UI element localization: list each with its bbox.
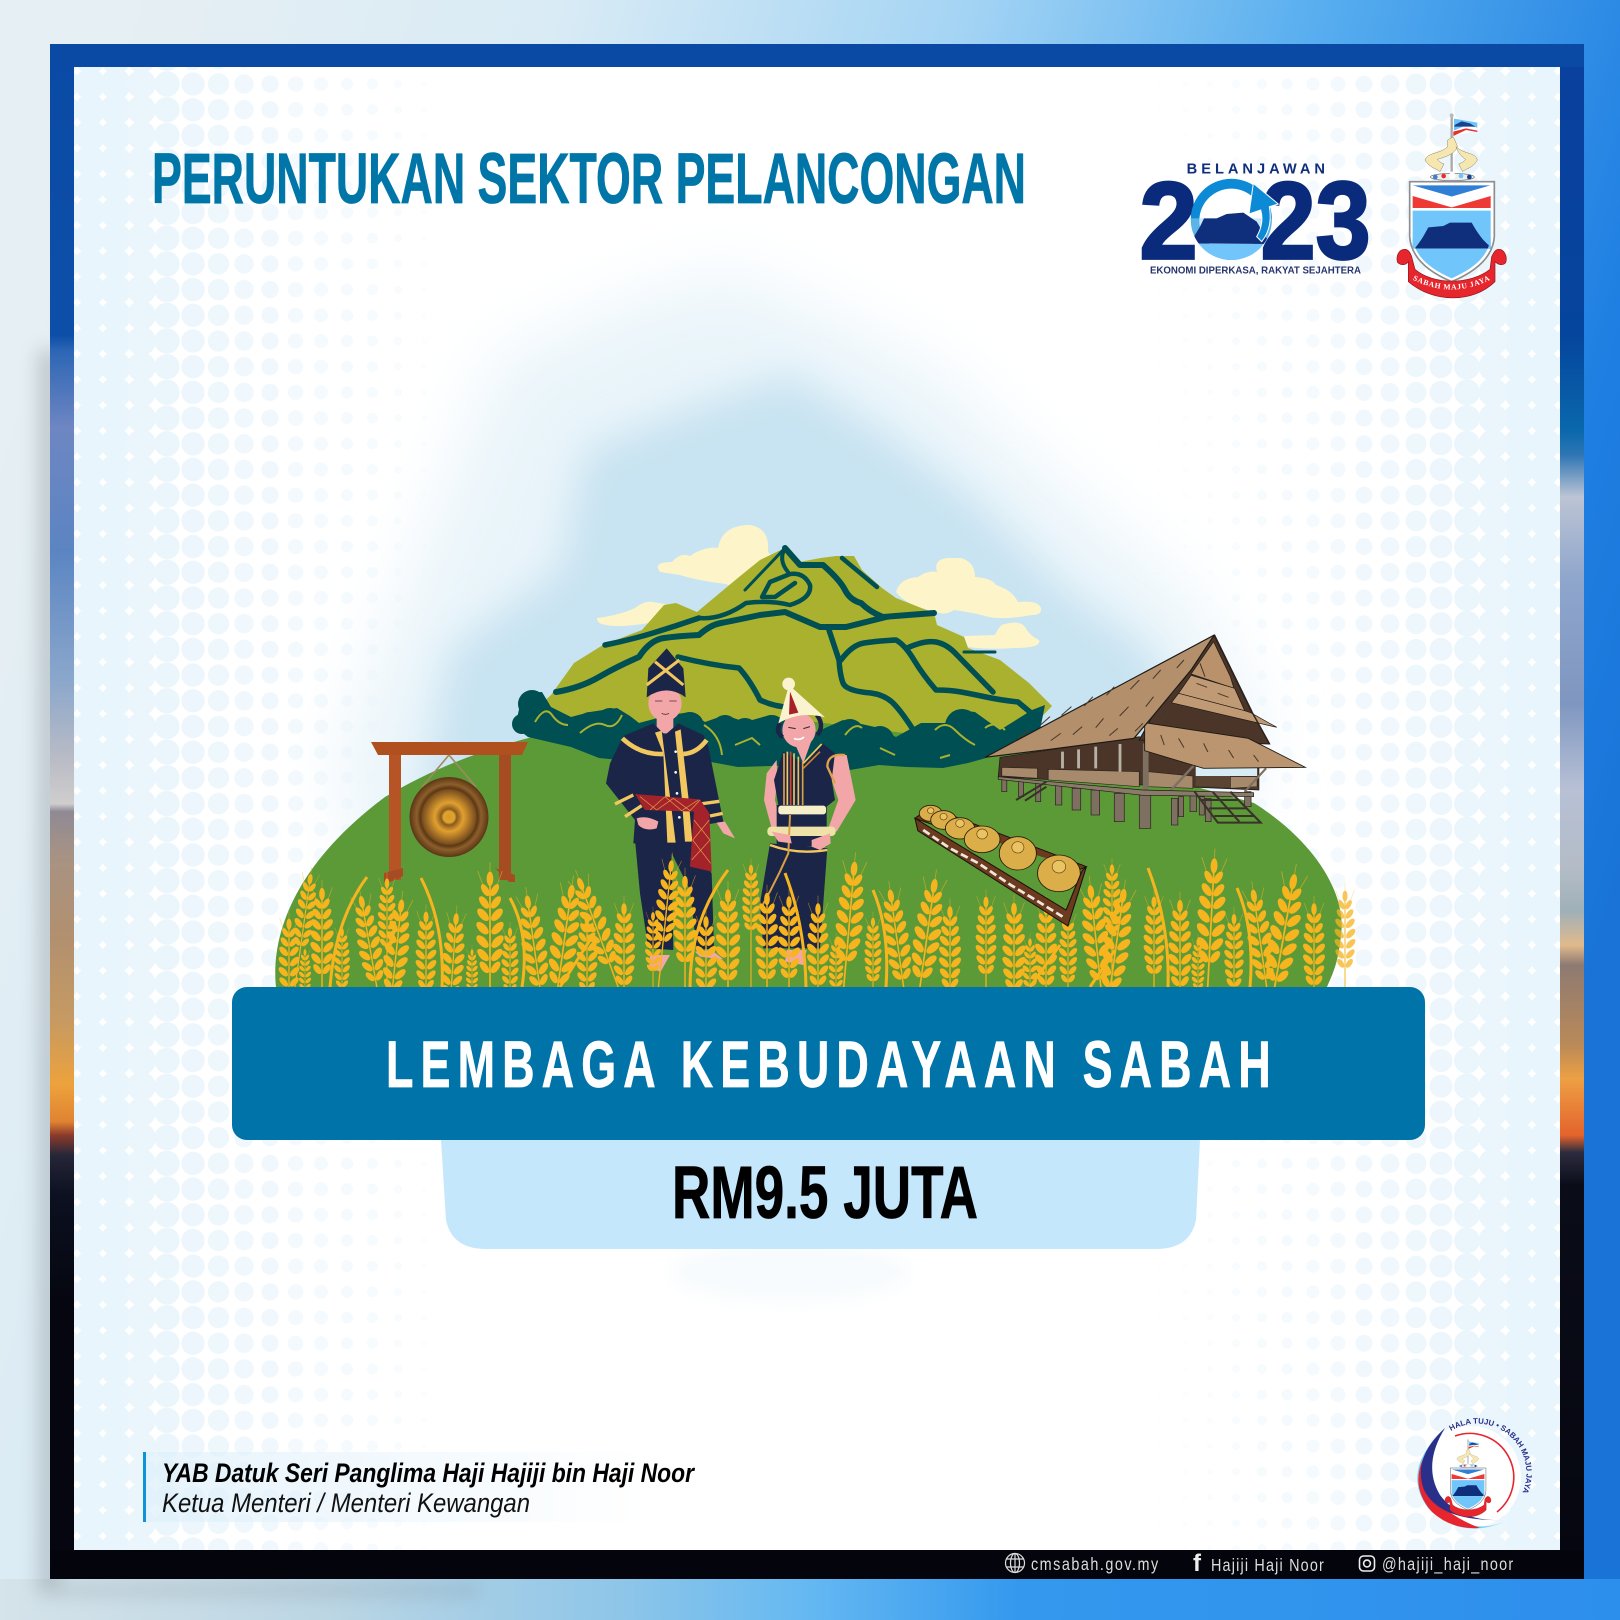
man trousers [635,840,714,950]
man hat [647,648,686,697]
woman feet [785,950,807,965]
logo: Sabah coat of arms [1396,113,1507,298]
woman neck [793,740,812,763]
round logo crescent [1417,1428,1504,1528]
banner text: LEMBAGA KEBUDAYAAN SABAH [386,1027,1271,1101]
man jacket trim [615,738,723,817]
clouds [597,525,1041,649]
instagram handle: @hajiji_haji_noor [1382,1555,1514,1574]
woman arms [764,760,782,828]
longhouse floor beam [998,777,1254,797]
woman bodice stripes [784,744,845,805]
logo ring with mountain [1190,178,1272,260]
longhouse [985,635,1305,828]
illustration: Sabah cultural scene [275,525,1357,1093]
kulintang gongs [919,805,1080,892]
man sash [635,794,712,872]
watercolour cloud backdrop [340,275,1260,1302]
amount: RM9.5 JUTA [672,1151,978,1234]
woman skirt [760,843,827,948]
mountain [540,548,1052,760]
woman face [782,713,816,747]
gong disc [410,777,488,857]
frame left strip [50,44,74,1579]
gong stand [371,742,528,882]
man hands [637,817,658,829]
round logo crest [1445,1439,1491,1517]
woman in traditional dress [760,678,856,965]
title: PERUNTUKAN SEKTOR PELANCONGAN [152,140,1026,219]
woman bodice [774,744,835,807]
logo tagline: EKONOMI DIPERKASA, RAKYAT SEJAHTERA [1150,266,1361,277]
gong posts [389,755,401,880]
kulintang gong set [915,805,1086,926]
frame right strip [1560,44,1584,1579]
man jacket [606,723,723,843]
rice field [277,848,1357,1093]
gong feet [384,868,403,882]
icon: facebook: f [1193,1550,1202,1577]
longhouse stairs [1016,782,1261,823]
woman hat [778,685,825,723]
minister role: Ketua Menteri / Menteri Kewangan [162,1488,530,1518]
background lower band [0,1579,1620,1620]
woman beaded belts [778,806,826,814]
minister name: YAB Datuk Seri Panglima Haji Hajiji bin Haji Noor [162,1458,695,1488]
frame bottom strip [50,1550,1584,1579]
man face [648,685,682,721]
longhouse opening [1196,767,1257,776]
blue banner [232,987,1425,1140]
logo digits 23: 23 [1261,159,1371,282]
kulintang back rail [915,807,1086,873]
gong top bar [371,742,528,755]
logo: Belanjawan 2023 [1142,164,1368,275]
round logo text: HALA TUJU • SABAH MAJU JAYA [1448,1418,1532,1492]
green hill [275,720,1342,987]
footer links [1006,1550,1514,1577]
round logo red arc [1455,1433,1514,1512]
frame top strip [50,44,1584,67]
logo word Belanjawan: BELANJAWAN [1187,161,1325,177]
man neck [657,715,673,733]
woman hands [772,832,792,843]
frame shadow [38,350,480,1594]
longhouse gable wall [1139,635,1270,744]
longhouse stilts [1002,778,1251,828]
longhouse main roof [985,635,1214,757]
icon: instagram [1360,1556,1374,1571]
longhouse gable thatch [1171,642,1277,727]
longhouse thatch marks [1018,660,1259,762]
gong rope [422,755,476,787]
light panel: amount [441,1140,1200,1249]
credit tint [146,1452,646,1522]
man in traditional dress [606,648,735,972]
man feet [649,955,670,972]
round logo disc [1421,1426,1521,1528]
icon: globe [1006,1553,1024,1573]
credit rule [143,1452,146,1522]
rice leaves [330,868,1251,987]
rice ears [279,866,323,1020]
logo digit 2: 2 [1139,159,1198,282]
kulintang front rail [915,818,1086,926]
facebook name: Hajiji Haji Noor [1211,1556,1324,1575]
minister credit [143,1452,695,1522]
website: cmsabah.gov.my [1031,1555,1159,1574]
longhouse walls [998,737,1259,790]
logo arrow [1249,183,1278,242]
tree line [512,690,1045,770]
logo: Hala Tuju Sabah Maju Jaya [1417,1418,1532,1528]
coat of arms motto: SABAH MAJU JAYA [1413,276,1490,290]
longhouse lower roof [1145,723,1305,768]
longhouse lattice [1002,767,1257,788]
